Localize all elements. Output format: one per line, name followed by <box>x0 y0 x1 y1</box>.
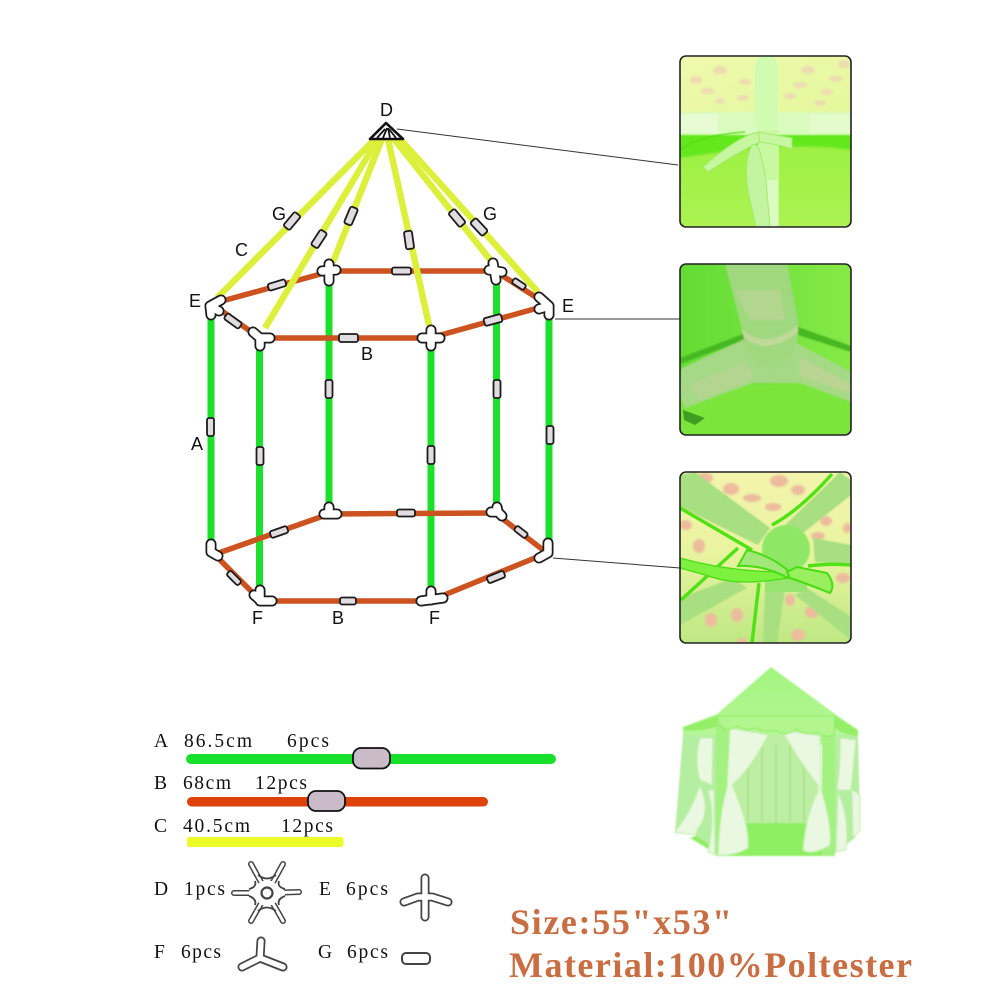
photo: corner joint <box>680 264 851 435</box>
diagram part labels: F <box>252 608 263 628</box>
photo: assembled green tent <box>675 667 860 856</box>
part A bar <box>154 731 556 768</box>
part E icon: E <box>319 879 331 900</box>
part A bar: 6pcs <box>287 731 329 752</box>
corner fittings E <box>210 263 549 346</box>
part A bar: 86.5cm <box>184 731 252 752</box>
tent floor <box>690 823 855 856</box>
diagram part labels: B <box>332 608 344 628</box>
green vertical poles A <box>211 280 549 590</box>
tent curtains <box>675 728 860 855</box>
part B bar: 68cm <box>183 773 231 794</box>
part B bar <box>154 773 488 811</box>
part C bar: 40.5cm <box>183 816 250 837</box>
part C bar <box>154 816 344 847</box>
diagram part labels: E <box>189 291 201 311</box>
tent roof <box>683 667 858 745</box>
diagram part labels: G <box>483 204 497 224</box>
diagram part labels: C <box>235 240 248 260</box>
tent frame diagram <box>189 100 574 628</box>
part F icon: F <box>154 942 165 963</box>
tent pillars <box>716 725 729 856</box>
connector sleeves G <box>207 206 554 604</box>
diagram part labels: A <box>191 434 203 454</box>
part C bar: C <box>154 816 167 837</box>
tent scalloped valance <box>717 716 835 736</box>
part F icon: 6pcs <box>181 942 221 963</box>
part G icon: G <box>318 942 332 963</box>
yellow roof poles C <box>217 139 538 328</box>
tent side panels <box>675 735 717 850</box>
diagram part labels: D <box>380 100 393 120</box>
photo: top hub tie <box>680 56 851 227</box>
part D icon <box>154 864 299 921</box>
part C bar: 12pcs <box>281 816 333 837</box>
leader lines <box>397 129 680 568</box>
size text: Size:55"x53" <box>510 902 732 942</box>
diagram part labels <box>189 100 574 628</box>
base fittings F <box>211 507 548 601</box>
part G icon <box>318 942 430 964</box>
material text: Material:100%Poltester <box>509 945 912 985</box>
tent interior <box>733 735 818 825</box>
part E icon: 6pcs <box>346 879 388 900</box>
part G icon: 6pcs <box>347 942 388 963</box>
diagram part labels: E <box>562 296 574 316</box>
diagram part labels: B <box>361 344 373 364</box>
part D icon: 1pcs <box>184 879 225 900</box>
photo: roof hub tie <box>680 472 851 644</box>
part B bar: B <box>154 773 167 794</box>
part E icon <box>319 878 448 917</box>
parts legend <box>154 731 556 967</box>
diagram part labels: G <box>272 204 286 224</box>
part B bar: 12pcs <box>255 773 307 794</box>
top hub D <box>370 123 403 139</box>
part F icon <box>154 941 283 967</box>
diagram part labels: F <box>429 608 440 628</box>
part A bar: A <box>154 731 168 752</box>
orange horizontal poles B <box>212 271 547 601</box>
part D icon: D <box>154 879 168 900</box>
